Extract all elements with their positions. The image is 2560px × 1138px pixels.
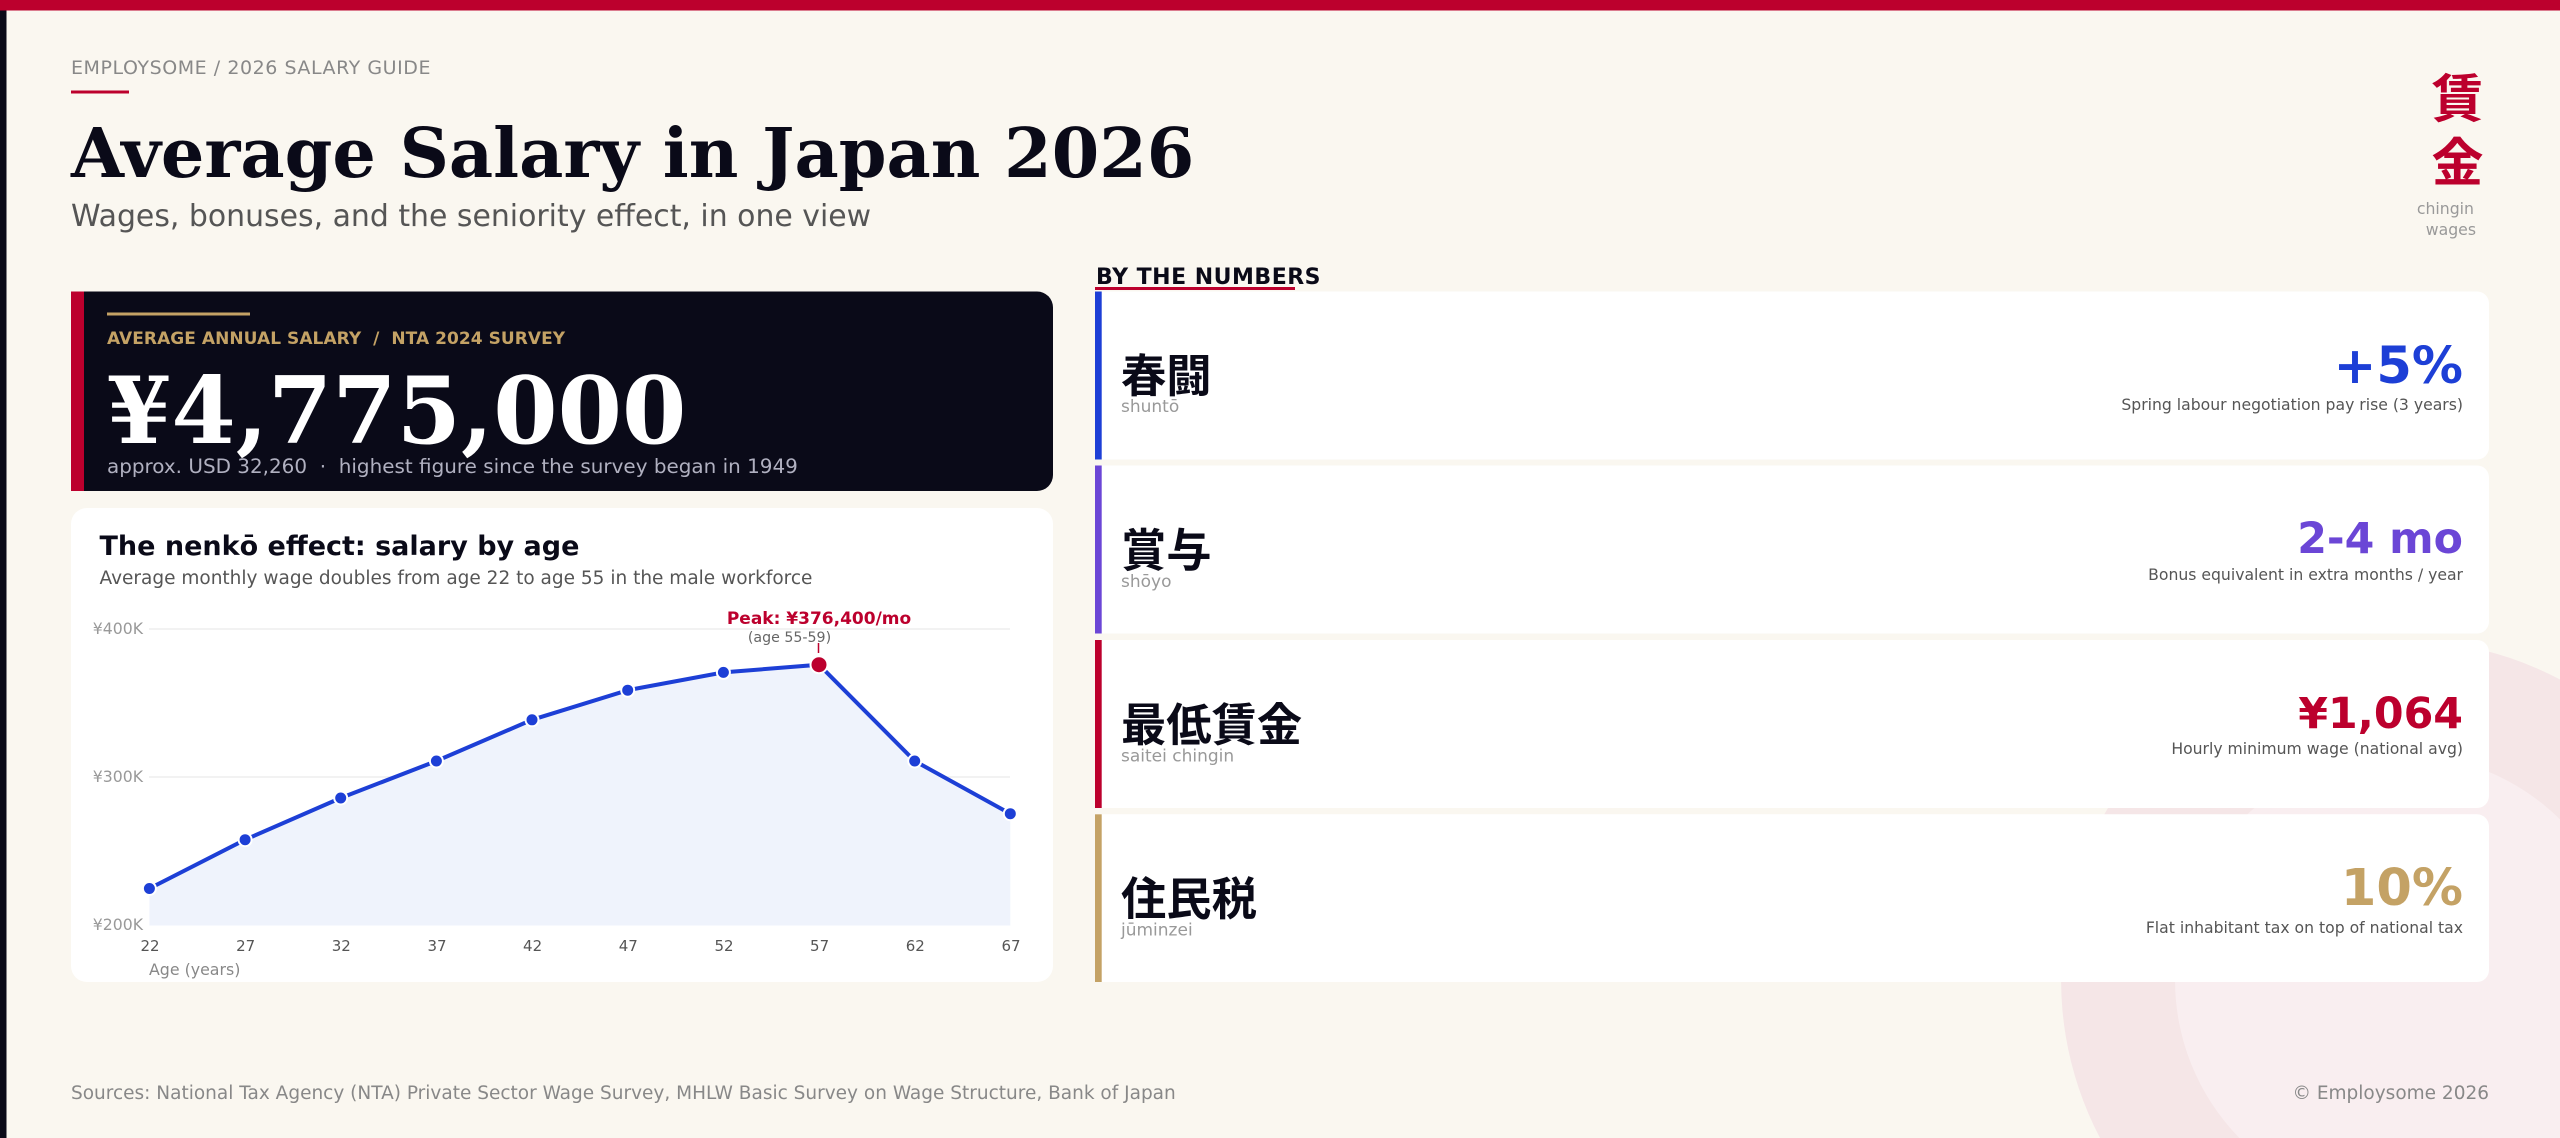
line chart: salary by age bbox=[143, 665, 1017, 926]
card: saitei chingin: 最低賃金 bbox=[1121, 689, 1302, 755]
card: saitei chingin: saitei chingin bbox=[1121, 746, 1234, 766]
left accent bar bbox=[0, 10, 6, 1138]
x axis labels: 52 bbox=[714, 937, 734, 955]
top accent bar bbox=[0, 0, 2560, 10]
y axis labels bbox=[93, 619, 144, 934]
hero label: AVERAGE ANNUAL SALARY / NTA 2024 SURVEY bbox=[107, 329, 566, 349]
subtitle: Wages, bonuses, and the seniority effect, in one view bbox=[71, 199, 871, 234]
chart subtitle: Average monthly wage doubles from age 22 to age 55 in the male workforce bbox=[100, 568, 812, 589]
y axis labels: ¥400K bbox=[93, 619, 144, 638]
card: shunto: Spring labour negotiation pay rise (3 years) bbox=[2121, 395, 2463, 414]
eyebrow underline bbox=[71, 90, 129, 94]
card: juminzei bbox=[1095, 814, 2489, 982]
card: saitei chingin bbox=[1095, 640, 2489, 808]
x axis labels: 32 bbox=[332, 937, 351, 955]
chart title: The nenkō effect: salary by age bbox=[100, 531, 579, 562]
card: juminzei: Flat inhabitant tax on top of national tax bbox=[2146, 918, 2463, 937]
y axis labels: ¥300K bbox=[93, 767, 144, 786]
card: shoyo bbox=[1095, 466, 2489, 634]
x axis labels: 42 bbox=[523, 937, 542, 955]
footer sources: Sources: National Tax Agency (NTA) Private Sector Wage Survey, MHLW Basic Survey on Wage Structure, Bank of Japan bbox=[71, 1083, 1176, 1104]
card: juminzei: 住民税 bbox=[1121, 863, 1257, 929]
peak marker bbox=[727, 609, 911, 673]
kanji seal: chingin: wages bbox=[2426, 220, 2476, 239]
card: shoyo: 賞与 bbox=[1121, 514, 1212, 580]
hero note: approx. USD 32,260 · highest figure since the survey began in 1949 bbox=[107, 454, 798, 478]
card: shoyo: 2-4 mo bbox=[2297, 514, 2463, 564]
x axis labels: 67 bbox=[1001, 937, 1021, 955]
kanji seal: chingin bbox=[2417, 58, 2484, 239]
panel: hero salary bbox=[71, 292, 1053, 491]
card: shunto bbox=[1095, 292, 2489, 460]
footer copyright: © Employsome 2026 bbox=[2292, 1083, 2489, 1104]
x axis labels bbox=[140, 937, 1021, 955]
x axis labels: 22 bbox=[140, 937, 160, 955]
section heading: BY THE NUMBERS bbox=[1096, 265, 1321, 290]
x axis labels: 27 bbox=[236, 937, 255, 955]
y axis labels: ¥200K bbox=[93, 915, 144, 934]
card: shunto: 春闘 bbox=[1121, 340, 1212, 406]
eyebrow label: EMPLOYSOME / 2026 SALARY GUIDE bbox=[71, 57, 431, 79]
kanji seal: chingin: chingin bbox=[2417, 199, 2474, 218]
panel: nenko chart bbox=[71, 508, 1053, 982]
x axis labels: 47 bbox=[619, 937, 638, 955]
kanji seal: chingin: 賃 bbox=[2431, 58, 2484, 132]
card: shoyo: shōyo bbox=[1121, 572, 1172, 592]
x axis labels: 57 bbox=[810, 937, 829, 955]
section heading underline bbox=[1095, 287, 1295, 290]
x axis labels: 62 bbox=[906, 937, 925, 955]
card: shunto: +5% bbox=[2334, 337, 2463, 396]
card: shunto: shuntō bbox=[1121, 397, 1179, 417]
card: saitei chingin: ¥1,064 bbox=[2298, 689, 2463, 739]
x axis title: Age (years) bbox=[149, 960, 240, 979]
x axis labels: 37 bbox=[427, 937, 447, 955]
card: saitei chingin: Hourly minimum wage (national avg) bbox=[2171, 739, 2463, 758]
kanji seal: chingin: 金 bbox=[2431, 122, 2484, 196]
hero number: ¥4,775,000 bbox=[107, 356, 686, 465]
card: juminzei: jūminzei bbox=[1120, 920, 1193, 940]
card: shoyo: Bonus equivalent in extra months / year bbox=[2148, 565, 2464, 584]
peak marker: (age 55-59) bbox=[748, 630, 831, 646]
title: Average Salary in Japan 2026 bbox=[70, 114, 1194, 194]
peak marker: Peak: ¥376,400/mo bbox=[727, 609, 911, 629]
card: juminzei: 10% bbox=[2341, 859, 2463, 918]
